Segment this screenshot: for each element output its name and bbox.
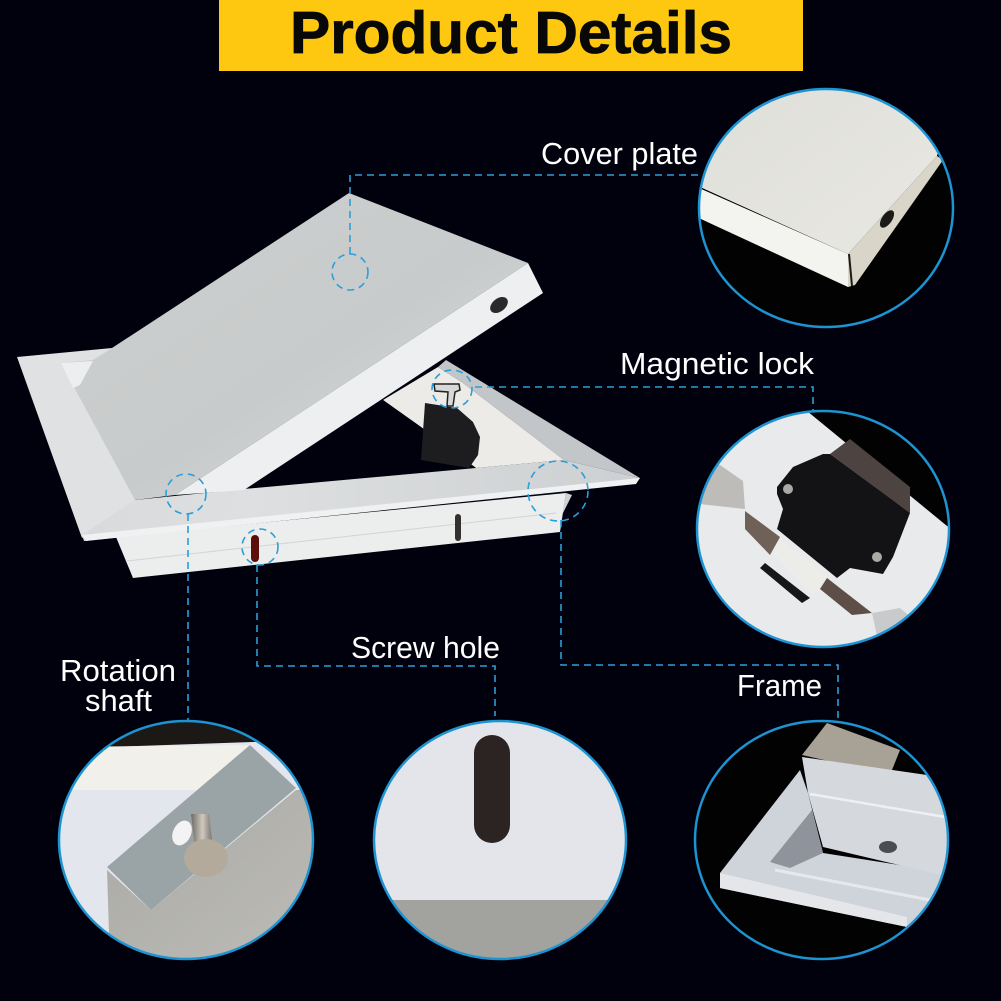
frame front rim: [82, 460, 640, 541]
long front edge: [700, 189, 848, 287]
metal band: [107, 745, 296, 910]
marker: cover plate: [332, 254, 368, 290]
label: Screw hole: Screw hole: [351, 630, 500, 665]
detail circle: screw hole: [370, 715, 630, 965]
second screw hole slot: [455, 514, 461, 541]
right side edge: [848, 156, 943, 287]
recess shading: [770, 810, 823, 868]
cover plate top face: [61, 193, 528, 500]
marker: frame: [528, 461, 588, 521]
black background corner: [807, 411, 955, 530]
opening darkness: [244, 400, 476, 490]
black pad: [760, 563, 810, 603]
outer wall: [802, 757, 950, 877]
plate surface: [702, 90, 938, 254]
grey frame strip: [701, 464, 745, 509]
silver tongue: [773, 539, 827, 596]
red screw hole slot: [251, 535, 259, 562]
leader: magnetic lock: [475, 387, 813, 411]
marker: magnetic lock: [432, 370, 472, 408]
cover plate finger hole: [487, 294, 511, 316]
detail circle: frame: [690, 715, 955, 965]
inner brown wall: [802, 723, 900, 775]
leader: rotation shaft: [187, 514, 189, 721]
label: Rotation shaft: shaft: [85, 683, 152, 718]
lower grey corner: [872, 608, 908, 634]
shaft slot: [172, 820, 192, 846]
marker: screw hole: [242, 529, 278, 565]
frame notch corner: [560, 493, 572, 530]
label: Rotation shaft: Rotation: [60, 653, 176, 688]
frame left rim: [17, 348, 135, 538]
title banner: Product Details: [290, 0, 732, 66]
wall rib: [810, 794, 945, 817]
title banner: [219, 0, 803, 71]
shaft pin: [191, 814, 212, 842]
main product illustration: open hatch door: [17, 193, 640, 578]
frame recess highlight: [61, 361, 93, 388]
lower grey panel: [107, 790, 320, 965]
cover plate front edge: [175, 263, 543, 495]
leader: cover plate: [350, 175, 705, 254]
shaft head: [184, 839, 228, 877]
label: Frame: Frame: [737, 668, 822, 703]
leader: frame: [561, 520, 838, 721]
frame front lip highlight: [82, 478, 640, 541]
label: Cover plate: Cover plate: [541, 136, 698, 171]
label: Rotation shaft: [60, 653, 176, 718]
detail circle: cover plate: [698, 88, 954, 328]
corner seam: [849, 254, 852, 286]
callout markers and leader lines: [166, 175, 838, 721]
lock housing body: [777, 454, 910, 578]
frame right rim: [438, 360, 640, 478]
floor channel: [775, 870, 930, 900]
slot: [474, 735, 510, 843]
label: Magnetic lock: Magnetic lock: [620, 346, 815, 381]
detail circle: rotation shaft: [50, 715, 320, 965]
dark top band: [110, 722, 256, 746]
magnetic lock on frame: [421, 384, 480, 468]
frame bottom side wall: [116, 493, 566, 578]
brown metal pieces: [745, 511, 780, 555]
lock housing top: [830, 439, 910, 513]
flange rim: [720, 873, 907, 927]
frame screw hole: [879, 841, 897, 853]
flange: [720, 770, 950, 927]
detail circle: magnetic lock: [690, 405, 960, 655]
grey lower wall: [392, 900, 608, 958]
plate hole: [880, 210, 894, 228]
frame inner far wall: [383, 367, 564, 468]
marker: rotation shaft: [166, 474, 206, 514]
warm upper white: [72, 745, 252, 790]
lock screws: [783, 484, 793, 494]
leader: screw hole: [257, 565, 495, 716]
